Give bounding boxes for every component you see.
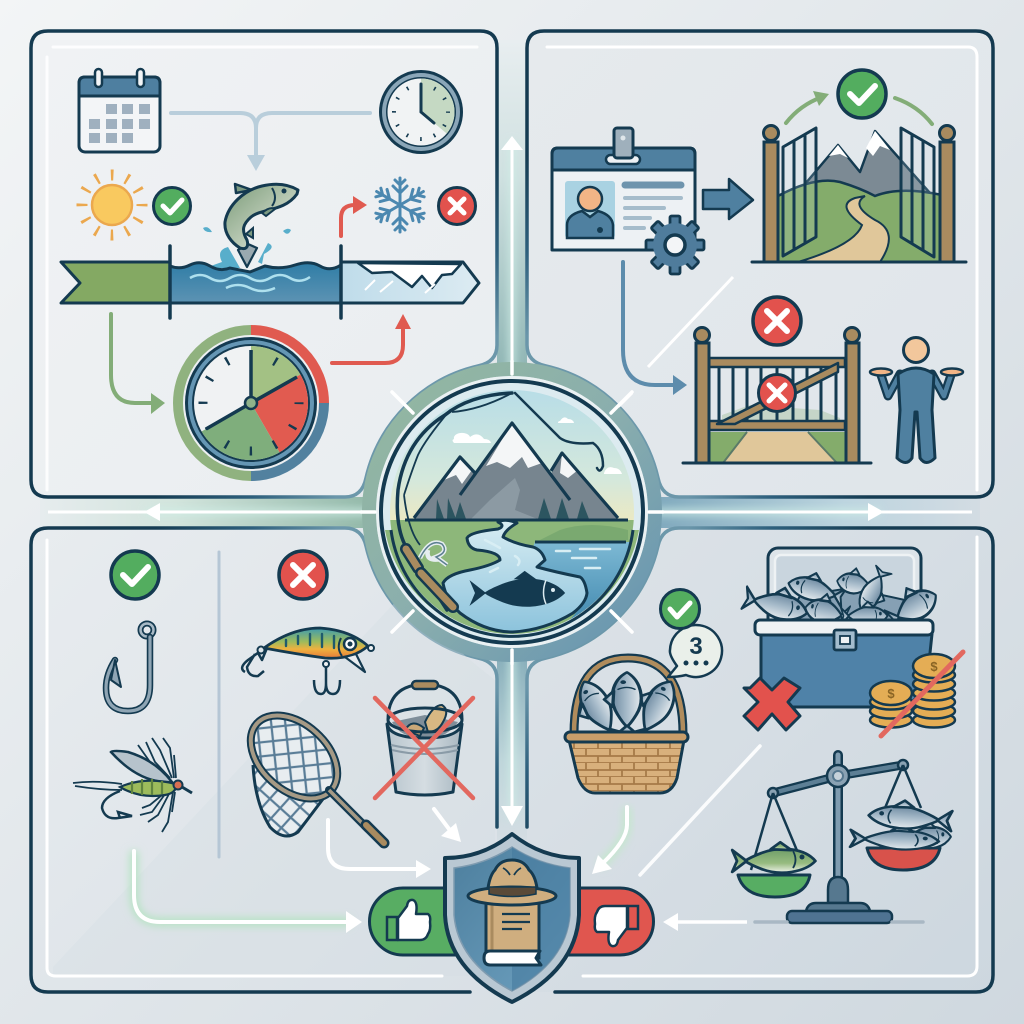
timeline ribbon: [61, 246, 479, 318]
cross badge: [279, 551, 327, 599]
callout: limit of three: 3: [689, 633, 703, 660]
icon: cross badge: [438, 188, 476, 224]
arrow: id to open gate: [703, 179, 753, 219]
arrow: bucket to shield: [434, 809, 461, 842]
icon: bucket crossed out: [375, 681, 473, 798]
arrow: red up to ice: [332, 314, 411, 363]
icon: coin stacks crossed out: $: [930, 659, 938, 674]
icon: coin stacks crossed out: $: [887, 686, 895, 701]
arrow: net to badge: [328, 820, 431, 878]
book: [484, 900, 541, 965]
medallion inner ring: [391, 530, 633, 636]
check badge with arcs: [786, 70, 932, 124]
check badge: [111, 551, 159, 599]
verdict bar with shield: [369, 834, 653, 1002]
channels between panels: [40, 40, 980, 840]
closed gate: [683, 328, 871, 463]
medallion landscape: [390, 390, 634, 634]
decorative ground line: [755, 920, 923, 924]
icon: calendar: [79, 69, 160, 152]
shield inner: [454, 847, 570, 991]
icon: sun: [82, 175, 142, 235]
center medallion: [361, 361, 663, 664]
arrow: id to closed gate: [623, 262, 687, 395]
gauge clock: [178, 330, 324, 476]
fishing rod: [397, 393, 512, 610]
icon: leaping fish: [203, 184, 298, 268]
shield: [445, 834, 579, 1002]
panel: catch limits: [527, 528, 993, 992]
icon: basket of three fish: [565, 658, 688, 793]
ranger hat: [468, 860, 556, 905]
arrow: cooler diagonal: [640, 746, 760, 875]
cardinal and diagonal ticks: [361, 361, 663, 664]
icon: overfilled cooler: [741, 548, 942, 707]
panel: season timing: [31, 31, 497, 497]
icon: gear: [646, 216, 704, 274]
panel: gear rules: [31, 528, 497, 992]
icon: wall clock: [379, 70, 463, 154]
arrow: scale to thumbs down: [663, 913, 747, 931]
icon: coin stacks crossed out: [870, 652, 963, 736]
check badge: [660, 590, 700, 628]
icon: shrugging person: [870, 338, 963, 462]
icon: crankbait lure: [242, 628, 374, 694]
panel: licensing: [527, 31, 993, 497]
icon: id badge: [552, 128, 695, 250]
callout: limit of three: [668, 625, 722, 677]
arrow: allowed gear to thumbs up: [134, 851, 362, 933]
open gate: [752, 126, 966, 262]
icon: balance scale: [732, 755, 953, 923]
icon: red cross mark: [744, 678, 800, 730]
arrow: to snowflake: [341, 196, 367, 236]
channel arrows: [144, 136, 884, 826]
icon: fly lure: [73, 738, 192, 832]
icon: landing net: [235, 699, 384, 843]
icon: snowflake: [373, 178, 427, 232]
arrow: green to gauge: [111, 314, 165, 414]
icon: check badge: [154, 188, 190, 224]
cross badge over gate: [753, 297, 801, 345]
icon: single hook: [106, 624, 154, 711]
pill: illegal thumbs down: [555, 888, 653, 955]
arrow: calendar and clock to fish: [171, 113, 370, 171]
pill: legal thumbs up: [369, 888, 470, 955]
arrow: basket to shield: [592, 807, 627, 874]
